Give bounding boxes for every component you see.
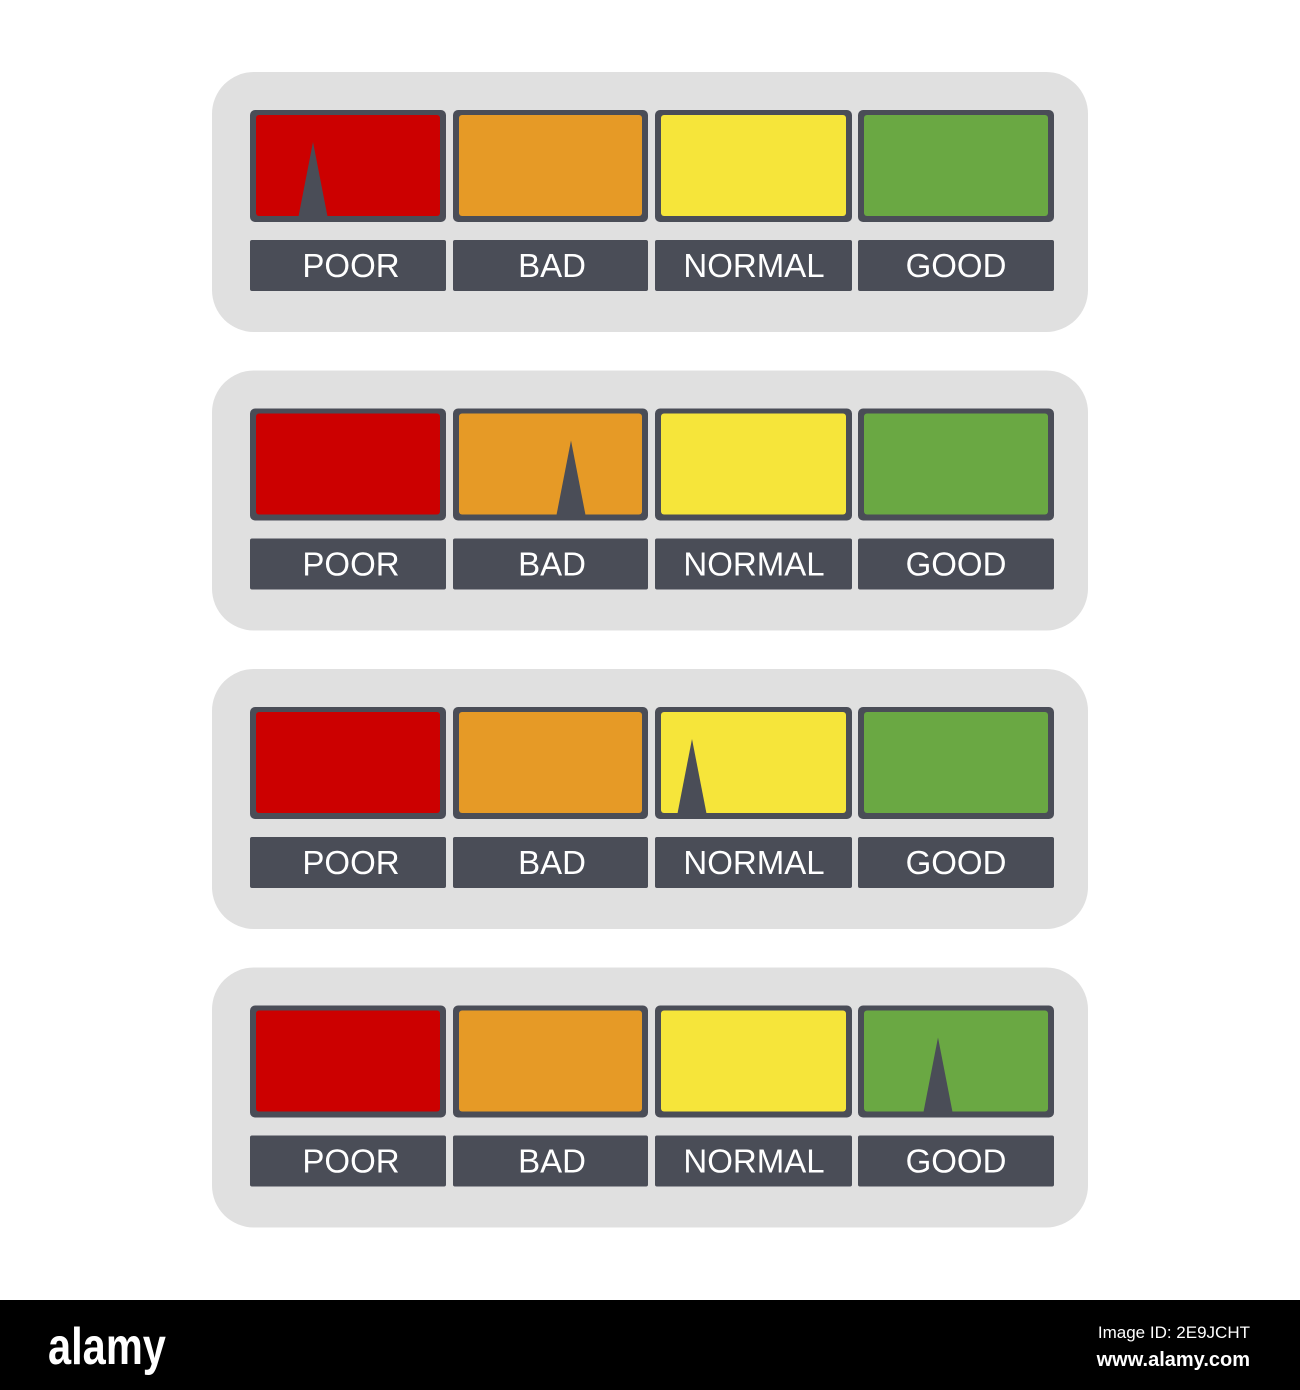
footer image id: Image ID: 2E9JCHT (1098, 1323, 1250, 1342)
needle: normal (677, 739, 707, 816)
panel: meter poor (212, 72, 1088, 332)
panel: meter good (212, 968, 1088, 1228)
needle: bad (556, 440, 586, 518)
footer url: www.alamy.com (1096, 1349, 1250, 1371)
needle: poor (298, 142, 328, 219)
needle: good (923, 1038, 953, 1114)
footer logo: alamy (48, 1317, 166, 1375)
panel: meter bad (212, 370, 1088, 630)
panel: meter normal (212, 669, 1088, 929)
footer bar (0, 1300, 1300, 1390)
